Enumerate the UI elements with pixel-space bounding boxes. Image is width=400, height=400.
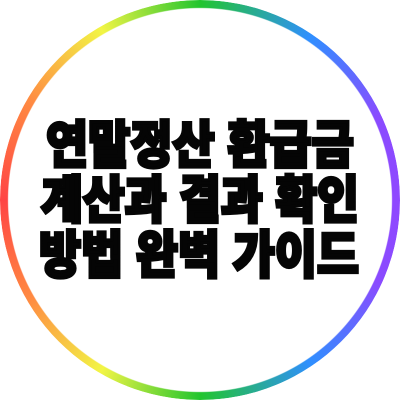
title line 3: 방법 완벽 가이드: [39, 227, 359, 284]
title line 1: 연말정산 환급금: [46, 117, 354, 174]
title line 2: 계산과 결과 확인: [41, 172, 359, 229]
